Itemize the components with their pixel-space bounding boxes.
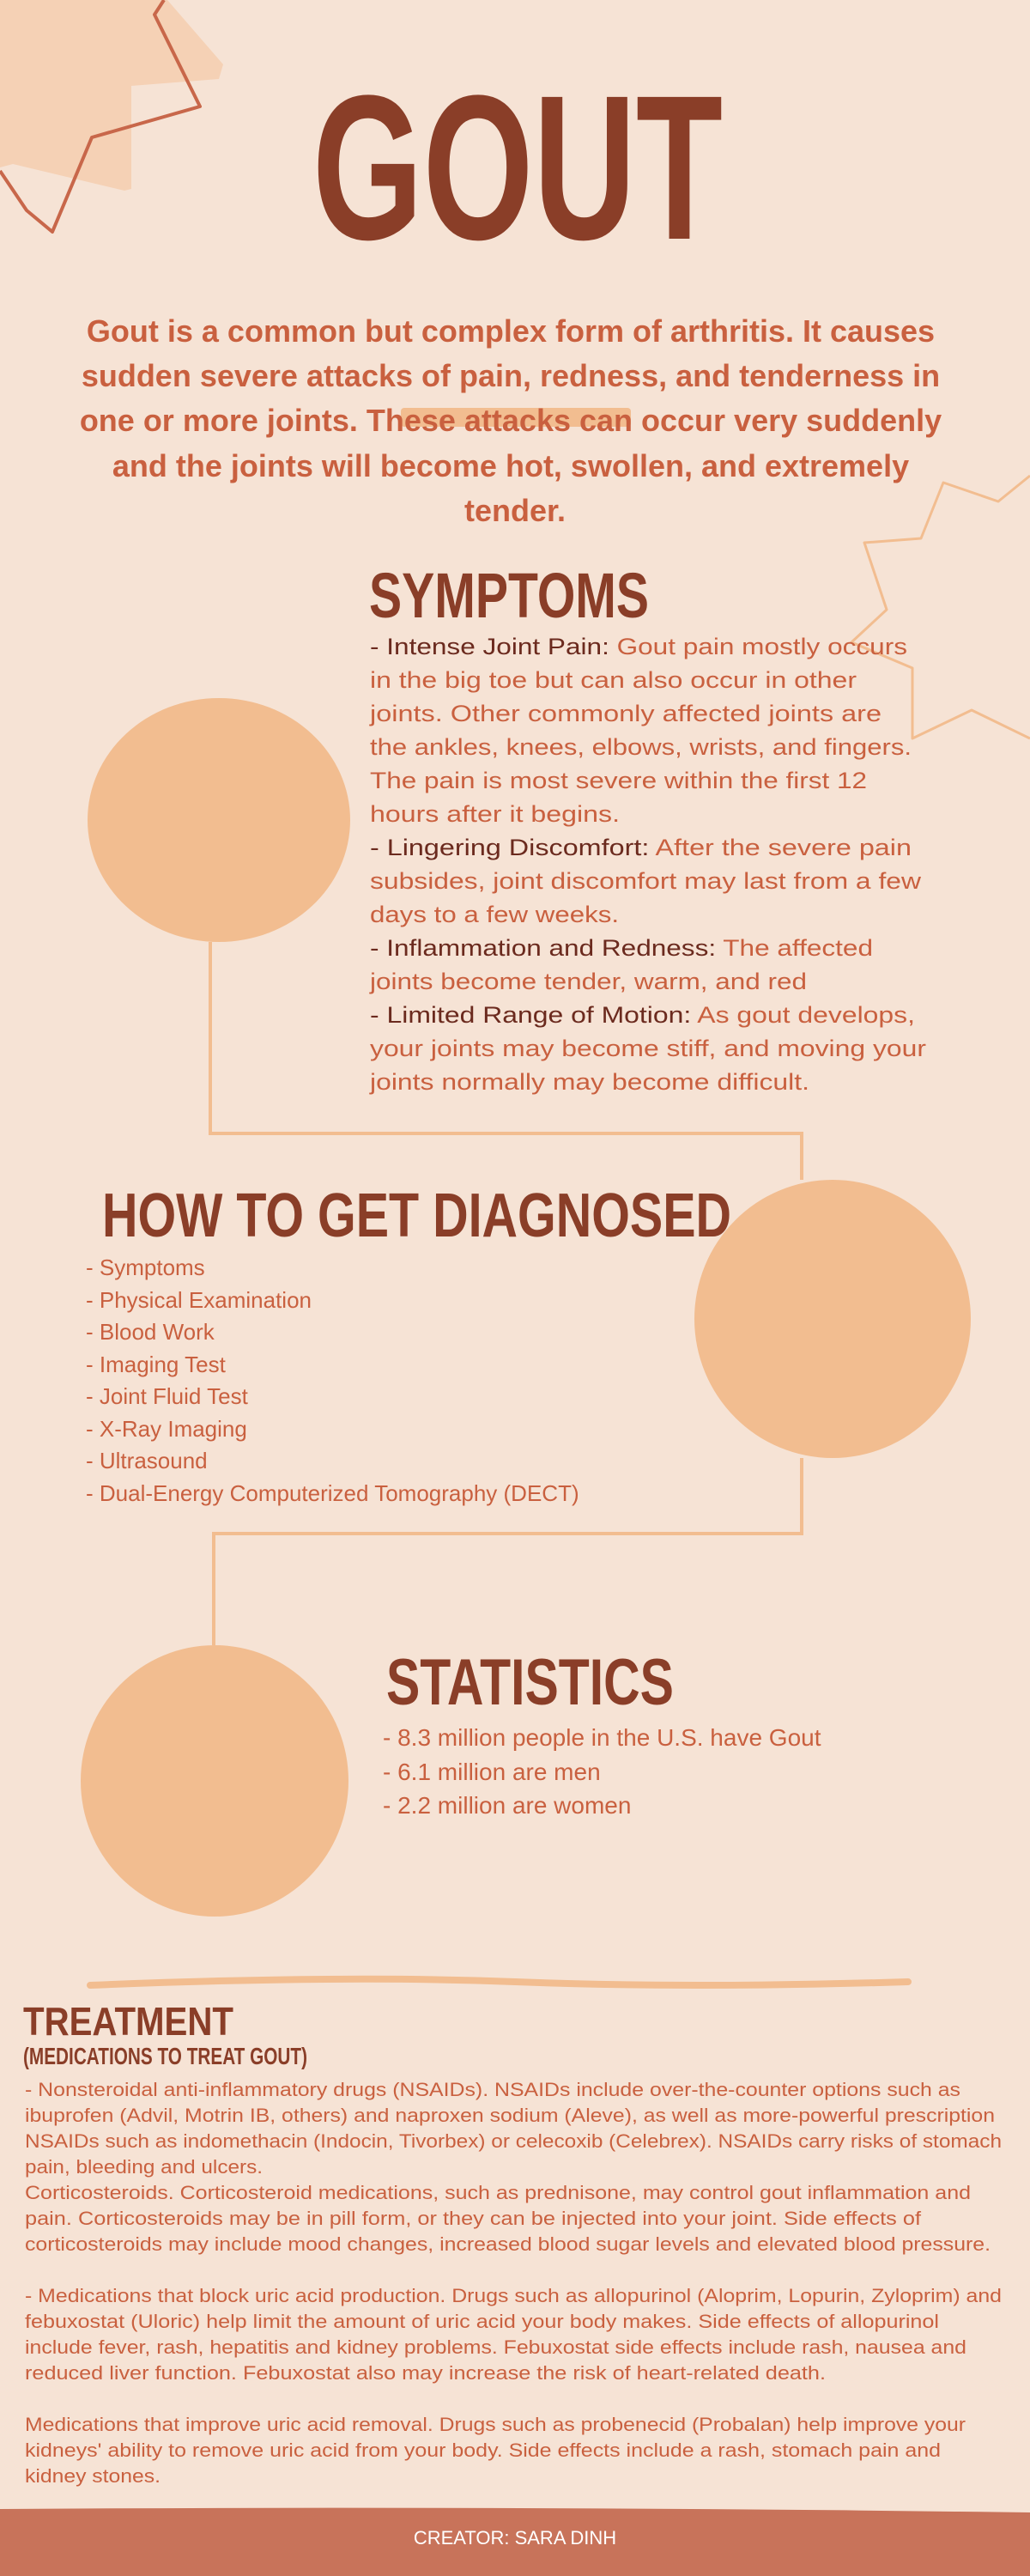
symptoms text: subsides, joint discomfort may last from a few [370, 868, 922, 894]
statistics list: - 6.1 million are men [383, 1759, 601, 1785]
diagnosis list: - Ultrasound [86, 1448, 208, 1473]
intro text: tender. [464, 493, 566, 528]
diagnosis list: - Imaging Test [86, 1352, 227, 1377]
statistics list: - 2.2 million are women [383, 1792, 631, 1819]
treatment text: Corticosteroids. Corticosteroid medications, such as prednisone, may control gout inflammation and [25, 2182, 971, 2203]
symptoms text: - Intense Joint Pain: Gout pain mostly occurs [370, 634, 907, 659]
treatment text [25, 2079, 1002, 2487]
heading: treatment: TREATMENT [23, 1999, 233, 2044]
decoration: top-left star [0, 0, 223, 232]
symptoms text: joints become tender, warm, and red [369, 969, 807, 994]
treatment text: febuxostat (Uloric) help limit the amount of uric acid your body makes. Side effects of allopurinol [25, 2311, 939, 2332]
statistics list [383, 1724, 821, 1819]
treatment text: Medications that improve uric acid removal. Drugs such as probenecid (Probalan) help improve your [25, 2414, 966, 2435]
statistics list: - 8.3 million people in the U.S. have Gout [383, 1724, 821, 1751]
intro text [80, 313, 950, 528]
diagnosis list: - Symptoms [86, 1255, 205, 1280]
symptoms text: - Limited Range of Motion: As gout develops, [370, 1002, 915, 1028]
intro text: Gout is a common but complex form of arthritis. It causes [87, 313, 935, 349]
symptoms text: hours after it begins. [370, 801, 620, 827]
symptoms text: days to a few weeks. [370, 902, 619, 927]
connector lines [210, 942, 802, 1645]
symptoms text: joints. Other commonly affected joints are [369, 701, 882, 726]
diagnosis list: - Blood Work [86, 1319, 215, 1345]
footer credit: CREATOR: SARA DINH [414, 2527, 616, 2549]
treatment text: - Medications that block uric acid production. Drugs such as allopurinol (Aloprim, Lopurin, Zyloprim) and [25, 2285, 1002, 2306]
intro text: one or more joints. These attacks can occur very suddenly [80, 403, 942, 438]
symptoms text: joints normally may become difficult. [369, 1069, 809, 1095]
heading: statistics: STATISTICS [386, 1646, 674, 1719]
symptoms text: your joints may become stiff, and moving your [370, 1036, 926, 1061]
intro text: sudden severe attacks of pain, redness, and tenderness in [82, 358, 940, 393]
footer [0, 2508, 1030, 2576]
symptoms text: - Lingering Discomfort: After the severe pain [370, 835, 912, 860]
treatment text: ibuprofen (Advil, Motrin IB, others) and naproxen sodium (Aleve), as well as more-powerful prescription [25, 2105, 995, 2126]
treatment text: pain. Corticosteroids may be in pill form, or they can be injected into your joint. Side effects of [25, 2208, 922, 2229]
treatment text: pain, bleeding and ulcers. [25, 2156, 263, 2178]
symptoms text: the ankles, knees, elbows, wrists, and fingers. [370, 734, 912, 760]
title: GOUT [312, 52, 723, 283]
circle 2 [694, 1180, 971, 1458]
treatment text: - Nonsteroidal anti-inflammatory drugs (NSAIDs). NSAIDs include over-the-counter options such as [25, 2079, 960, 2100]
treatment text: corticosteroids may include mood changes, increased blood sugar levels and elevated blood pressure. [25, 2233, 991, 2255]
divider line [90, 1979, 908, 1985]
decoration: right star outline [851, 476, 1030, 738]
circle 3 [81, 1645, 348, 1917]
symptoms text: - Inflammation and Redness: The affected [370, 935, 873, 961]
heading: symptoms: SYMPTOMS [369, 560, 649, 631]
symptoms text: in the big toe but can also occur in other [370, 667, 857, 693]
heading: how to get diagnosed: HOW TO GET DIAGNOSED [102, 1182, 731, 1250]
diagnosis list: - Joint Fluid Test [86, 1383, 249, 1409]
intro text: and the joints will become hot, swollen, and extremely [112, 448, 909, 483]
subheading: medications: (MEDICATIONS TO TREAT GOUT) [23, 2043, 307, 2069]
diagnosis list: - Dual-Energy Computerized Tomography (DECT) [86, 1480, 579, 1506]
diagnosis list [86, 1255, 579, 1506]
symptoms text [369, 634, 926, 1095]
symptoms text: The pain is most severe within the first 12 [370, 768, 867, 793]
diagnosis list: - X-Ray Imaging [86, 1416, 247, 1442]
treatment text: kidney stones. [25, 2465, 161, 2487]
circle 1 [88, 698, 350, 942]
treatment text: include fever, rash, hepatitis and kidney problems. Febuxostat side effects include rash, nausea and [25, 2336, 966, 2358]
highlight [401, 408, 631, 427]
treatment text: reduced liver function. Febuxostat also may increase the risk of heart-related death. [25, 2362, 826, 2384]
treatment text: NSAIDs such as indomethacin (Indocin, Tivorbex) or celecoxib (Celebrex). NSAIDs carry risks of stomach [25, 2130, 1002, 2152]
treatment text: kidneys' ability to remove uric acid from your body. Side effects include a rash, stomach pain and [25, 2439, 941, 2461]
diagnosis list: - Physical Examination [86, 1287, 312, 1313]
